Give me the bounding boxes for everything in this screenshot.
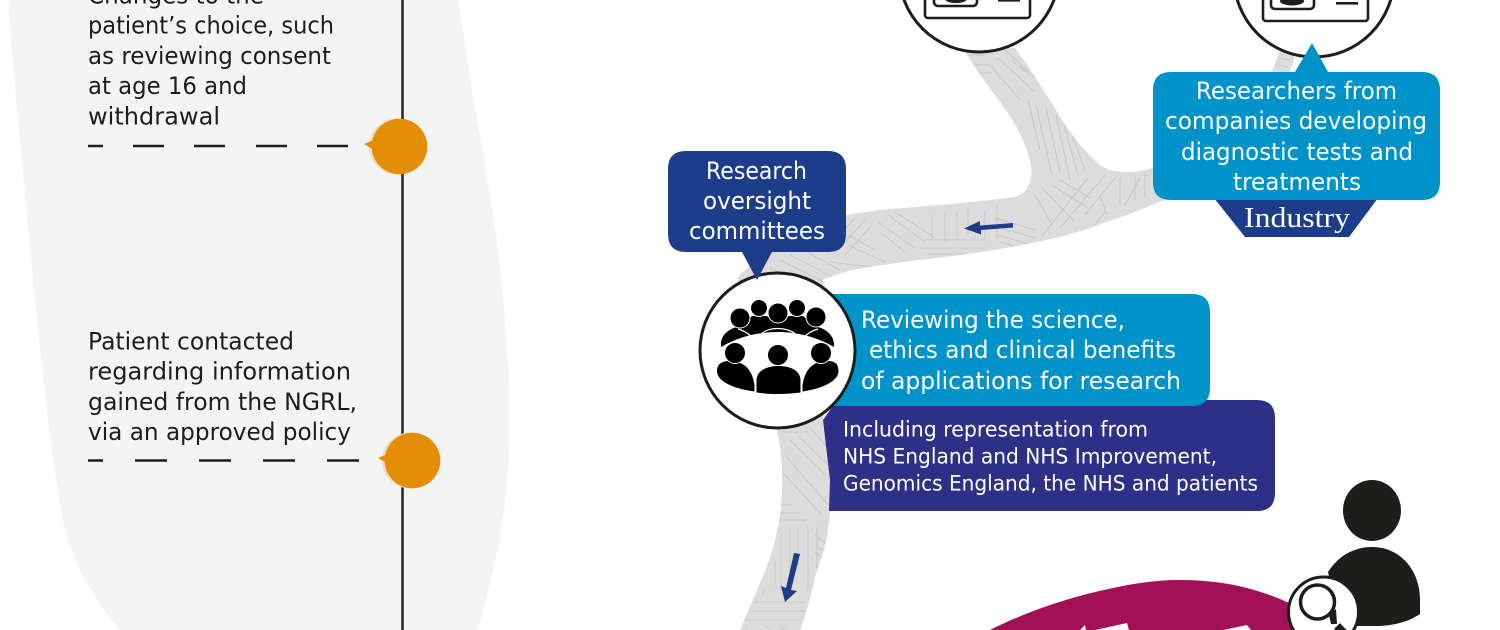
callout: researchers from companies: diagnostic tests and bbox=[1181, 138, 1413, 166]
text block: patient contacted bbox=[88, 328, 357, 446]
panel: reviewing applications: of applications for research bbox=[861, 367, 1181, 395]
text block: patient contacted: Patient contacted bbox=[88, 328, 294, 356]
text block: changes to patient's choice: withdrawal bbox=[88, 102, 220, 130]
text block: changes to patient's choice: as reviewing consent bbox=[88, 42, 331, 70]
callout: researchers from companies bbox=[1153, 43, 1440, 200]
icon: committee meeting circle bbox=[700, 273, 855, 428]
callout: research oversight committees bbox=[668, 151, 846, 280]
icon: patient figure with magnifier bbox=[1288, 480, 1420, 630]
panel: reviewing applications bbox=[825, 294, 1210, 406]
timeline marker 1 bbox=[364, 118, 427, 174]
panel: patient timeline background bbox=[8, 0, 509, 630]
arrow: flow downward bbox=[781, 553, 800, 602]
callout: industry label: Industry bbox=[1244, 203, 1350, 234]
pathway road with hatching bbox=[738, 48, 1294, 630]
dashed connector 2 bbox=[88, 459, 359, 462]
callout: researchers from companies: Researchers from bbox=[1196, 77, 1397, 105]
panel: reviewing applications: Reviewing the science, bbox=[861, 306, 1125, 334]
text block: changes to patient's choice: patient’s choice, such bbox=[88, 12, 334, 40]
callout: research oversight committees: Research bbox=[706, 157, 807, 185]
callout: research oversight committees: oversight bbox=[703, 187, 811, 215]
panel: representation details: NHS England and NHS Improvement, bbox=[843, 444, 1217, 470]
timeline marker 2 bbox=[378, 432, 440, 488]
timeline vertical line bbox=[401, 0, 404, 630]
icon: data card circle 2 bbox=[1234, 0, 1394, 57]
panel: representation details: Including representation from bbox=[843, 418, 1148, 442]
text block: changes to patient's choice bbox=[88, 0, 334, 130]
callout: researchers from companies: companies developing bbox=[1165, 107, 1427, 135]
dashed connector 1 bbox=[88, 145, 348, 147]
icon: data card circle 1 bbox=[899, 0, 1059, 52]
callout: industry label bbox=[1214, 198, 1378, 237]
text block: patient contacted: regarding information bbox=[88, 358, 351, 386]
panel: representation details bbox=[823, 400, 1275, 511]
panel: reviewing applications: ethics and clinical benefits bbox=[869, 336, 1176, 364]
callout: research oversight committees: committees bbox=[689, 217, 825, 245]
text block: patient contacted: via an approved policy bbox=[88, 418, 351, 446]
text block: patient contacted: gained from the NGRL, bbox=[88, 388, 357, 416]
arrow: flow toward committees bbox=[964, 221, 1013, 234]
panel: representation details: Genomics England, the NHS and patients bbox=[843, 472, 1258, 496]
text block: changes to patient's choice: at age 16 and bbox=[88, 72, 247, 100]
panel: magenta patient section bbox=[990, 580, 1295, 630]
callout: researchers from companies: treatments bbox=[1233, 168, 1361, 196]
